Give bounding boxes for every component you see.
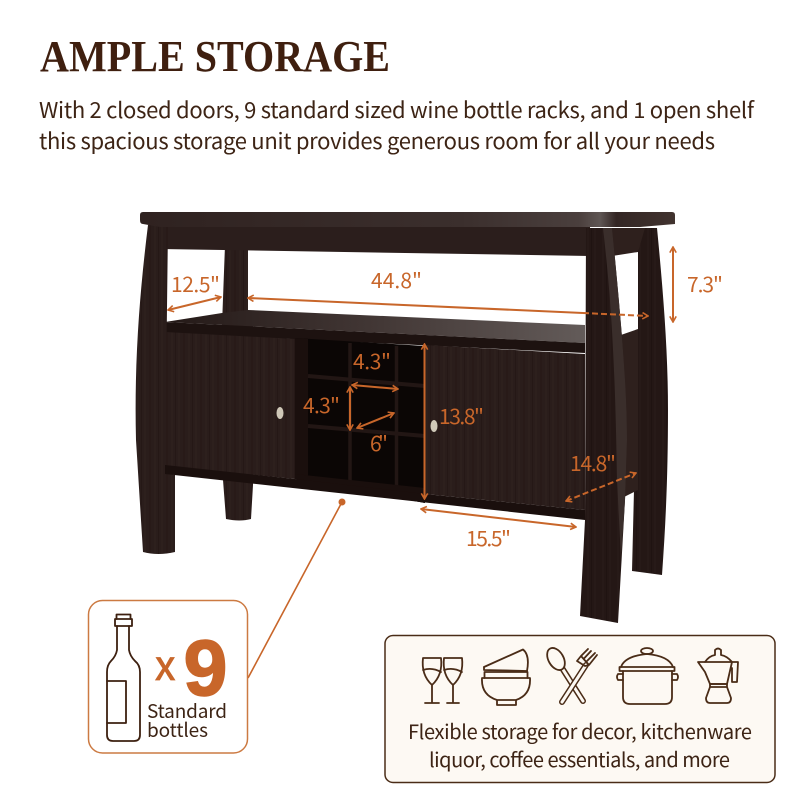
dimension: 6 rack depth: 6" <box>370 428 388 458</box>
right front leg <box>580 228 627 623</box>
dimension: 12.5 depth: 12.5" <box>171 269 220 299</box>
right door knob <box>430 420 438 432</box>
dimension: 15.5 door width <box>421 509 576 553</box>
bottle label: bottles <box>147 716 208 743</box>
bottle label <box>147 697 227 743</box>
description text: With 2 closed doors, 9 standard sized wine bottle racks, and 1 open shelf <box>39 93 755 125</box>
dimension: 14.8 inner depth <box>566 448 636 501</box>
dimension: 7.3 height: 7.3" <box>687 269 723 299</box>
title: AMPLE STORAGE <box>40 32 390 81</box>
base rail <box>165 465 585 520</box>
panel caption: liquor, coffee essentials, and more <box>429 744 730 773</box>
rear right leg <box>632 228 668 575</box>
shelf front edge <box>165 322 585 353</box>
icon: cooking pot <box>617 648 678 704</box>
right side apron and panel <box>605 228 645 498</box>
callout: standard bottles <box>88 600 248 753</box>
description text <box>39 93 755 156</box>
dimension: 4.3 rack width: 4.3" <box>353 346 391 376</box>
dimension: 15.5 door width: 15.5" <box>466 523 511 553</box>
dimension: 12.5 depth <box>168 269 221 310</box>
icon: wine bottle <box>107 614 140 741</box>
dimension: 7.3 height <box>673 247 723 322</box>
sideboard cabinet <box>136 212 675 623</box>
dimension: 4.3 rack height <box>303 387 350 430</box>
right door <box>425 345 585 510</box>
panel: flexible storage <box>385 636 775 782</box>
dimension: 4.3 rack width <box>352 346 398 389</box>
dimension: 44.8 width <box>248 265 648 316</box>
left door <box>165 332 295 479</box>
dimension: 14.8 inner depth: 14.8" <box>570 448 616 478</box>
upper apron <box>160 225 590 256</box>
left front leg <box>136 225 175 554</box>
rear left leg <box>222 245 253 520</box>
shelf surface <box>165 310 585 343</box>
dimension: 13.8 door height: 13.8" <box>439 401 484 431</box>
bottle label: Standard <box>147 697 227 724</box>
left door knob <box>276 407 284 419</box>
icon: stacked bowls <box>482 650 530 705</box>
dimension: 44.8 width: 44.8" <box>371 265 422 295</box>
wine rack <box>295 338 425 503</box>
panel caption: Flexible storage for decor, kitchenware <box>408 716 752 745</box>
multiplier x: x <box>155 632 175 692</box>
icon: spoon and fork <box>544 645 597 702</box>
dimension: 4.3 rack height: 4.3" <box>303 390 340 420</box>
tabletop <box>140 212 675 227</box>
panel caption <box>408 716 752 773</box>
number 9: 9 <box>184 623 227 712</box>
right front leg highlight <box>603 228 627 560</box>
leader line to bottle callout <box>248 498 346 678</box>
dimension: 6 rack depth <box>357 413 394 458</box>
icon: moka pot <box>698 648 738 703</box>
icon: wine glasses <box>423 658 462 703</box>
description text: this spacious storage unit provides generous room for all your needs <box>39 124 715 156</box>
